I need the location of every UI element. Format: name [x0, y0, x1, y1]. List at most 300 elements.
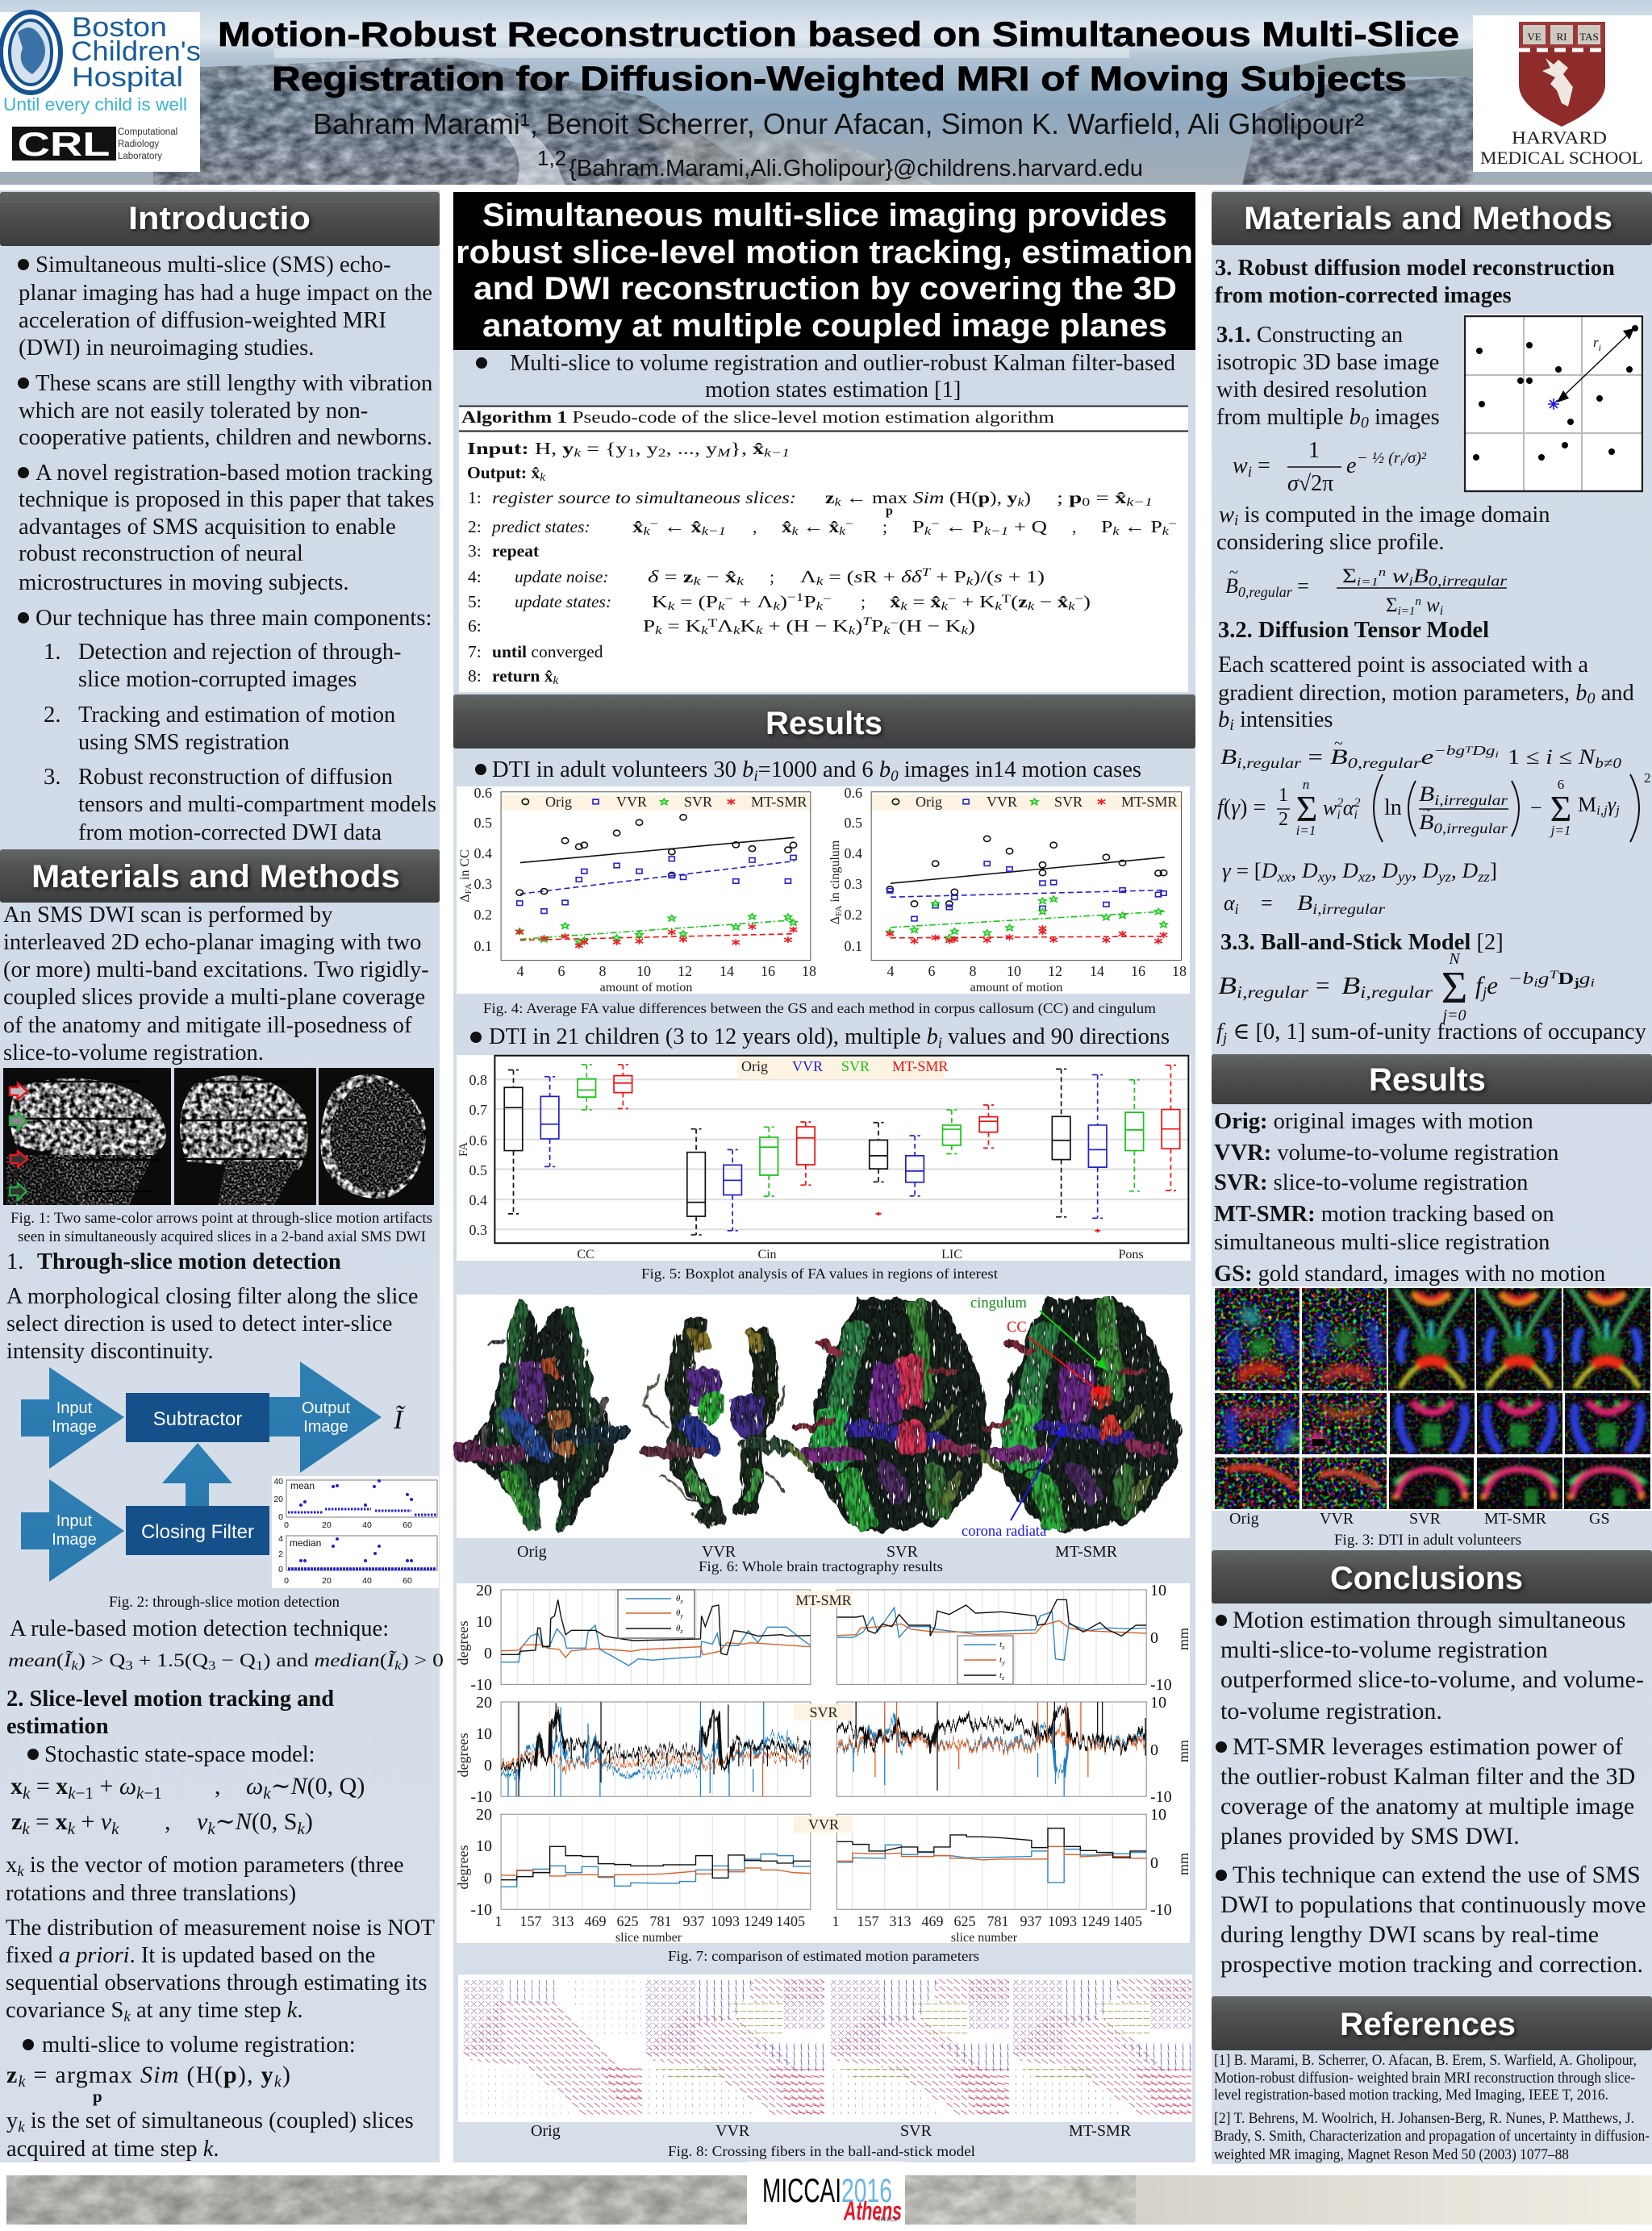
text block: introduction bullets: which are not easily tolerated by non-	[19, 398, 368, 423]
equation: regular b0: ~	[1229, 564, 1238, 582]
equation: motion detection rule: 3	[125, 1659, 133, 1673]
callout: CC arrow: CC	[1007, 1320, 1027, 1336]
algorithm lines: s + 1)	[994, 567, 1036, 586]
algorithm lines: x̂	[690, 517, 702, 536]
figure 4 caption: Fig. 4: Average FA value differences between the GS and each method in corpus callosum (CC) and cingulum	[483, 1000, 1156, 1017]
scatter plot: corpus callosum: 0.3	[474, 876, 492, 892]
algorithm lines: = {y	[581, 439, 628, 458]
text block: introduction bullets: from motion-corrected DWI data	[78, 820, 382, 845]
CRL logo: Laboratory	[118, 152, 162, 161]
method labels: Orig	[531, 2122, 561, 2140]
equation: tensor signal: ~	[1334, 735, 1343, 753]
equation: ball-and-stick	[1218, 950, 1595, 1024]
slice number ticks: 1093	[1048, 1913, 1077, 1929]
algorithm lines: z	[825, 488, 835, 507]
equation: gamma vector: zz	[1477, 869, 1490, 885]
equation: state model: k	[136, 1783, 144, 1803]
text block: weight note	[1216, 502, 1550, 555]
algorithm lines: k−1	[764, 447, 790, 460]
algorithm lines: −	[890, 617, 899, 630]
algorithm lines: )	[855, 616, 862, 636]
boxes: LIC	[870, 1123, 887, 1182]
inset chart: mean and median intensity: 60	[403, 1576, 412, 1586]
slice number ticks: 1093	[711, 1913, 740, 1929]
algorithm lines: −	[650, 518, 658, 531]
axis labels: 20	[476, 1694, 492, 1712]
equation: measurement model: z	[11, 1808, 22, 1835]
algorithm lines: ← P	[1119, 517, 1162, 536]
inset chart: mean and median intensity: 4	[278, 1534, 283, 1544]
algorithm lines: Λ	[717, 616, 733, 636]
algorithm lines: k	[756, 624, 763, 637]
algorithm lines: k	[733, 624, 740, 637]
bullet: DTI in adult volunteers: b	[879, 757, 891, 782]
bullet: multi-slice to volume: Multi-slice to volume registration and outlier-robust Kalman filter-based	[510, 351, 1175, 376]
slice number ticks: 625	[616, 1913, 639, 1929]
equation: ball-and-stick: j=0	[1440, 1007, 1466, 1024]
text block: coupled slices: k	[18, 2119, 25, 2136]
algorithm lines: ← max	[841, 488, 913, 507]
scatter plot: cingulum: 10	[1007, 963, 1021, 979]
slice number ticks: 1	[832, 1913, 839, 1929]
algorithm lines: update states:	[515, 592, 611, 611]
figure 3: DTI colour maps	[1212, 1286, 1652, 1528]
figure 6 caption: Fig. 6: Whole brain tractography results	[699, 1558, 943, 1574]
algorithm lines: sR + δδ	[854, 567, 917, 586]
figure 7 caption: Fig. 7: comparison of estimated motion parameters	[668, 1948, 979, 1964]
scatter plot: cingulum: 0.1	[844, 938, 862, 954]
CRL logo: Computational	[118, 127, 177, 137]
slice number ticks: 469	[921, 1913, 944, 1929]
figure 5: boxplot of FA values: 0.5	[469, 1162, 487, 1178]
figure 4: FA difference scatter plots	[457, 785, 1190, 995]
text block: motion parameters: is the vector of motion parameters (three	[24, 1853, 404, 1878]
heading: Introduction: Introductio	[128, 201, 311, 236]
figure 5: boxplot of FA values: 0.3	[469, 1222, 487, 1238]
text block: introduction bullets: These scans are still lengthy with vibration	[35, 370, 432, 396]
equation: registration objective	[6, 2062, 290, 2106]
figure 3 caption: Fig. 3: DTI in adult volunteers	[1334, 1532, 1521, 1549]
figure 5: boxplot of FA values: MT-SMR	[892, 1058, 948, 1074]
method labels: VVR	[702, 1543, 736, 1561]
equation: tensor cost function: ln	[1384, 795, 1402, 820]
inset chart: mean and median intensity: 40	[362, 1576, 372, 1586]
text block: introduction bullets: Simultaneous multi-slice (SMS) echo-	[35, 252, 391, 277]
equation: tensor cost function: i=1	[1296, 823, 1316, 838]
scatter plot: cingulum: 4	[887, 963, 894, 979]
slice number ticks: 937	[1020, 1913, 1042, 1929]
text block: introduction bullets: Our technique has three main components:	[35, 605, 432, 631]
text block: scattered point: intensities	[1234, 707, 1333, 732]
algorithm lines: k	[816, 575, 824, 588]
method labels: SVR	[900, 2122, 932, 2140]
bullet: DTI in adult volunteers: i	[753, 768, 758, 785]
inset chart: mean and median intensity: 20	[322, 1576, 332, 1586]
figure 5: boxplot of FA values: 0.4	[469, 1192, 487, 1208]
CRL logo	[12, 125, 177, 163]
text block: conclusions	[1216, 1607, 1646, 1978]
algorithm lines: p	[886, 504, 893, 518]
heading: Introduction	[0, 192, 440, 246]
equation: motion detection rule: median (Ĩ	[314, 1650, 394, 1671]
algorithm lines: −	[724, 593, 733, 606]
key message: Simultaneous multi-slice imaging provides	[482, 198, 1167, 233]
algorithm lines: x̂	[890, 592, 901, 611]
legend: translations: y	[1001, 1659, 1005, 1666]
callout: corona radiata arrow	[962, 1424, 1066, 1540]
algorithm lines: −	[845, 518, 853, 531]
algorithm lines: x̂	[1058, 592, 1069, 611]
subheading: through-slice motion detection: 1.	[6, 1249, 23, 1274]
axis labels: 0	[484, 1757, 492, 1774]
algorithm lines: 7:	[468, 642, 482, 661]
equation: Gaussian weight: w	[1233, 453, 1248, 478]
scatter plot: cingulum: 0.6	[844, 785, 862, 801]
text block: method definitions: simultaneous multi-slice registration	[1214, 1230, 1550, 1255]
algorithm lines: k	[941, 600, 948, 613]
text block: coupled slices	[6, 2108, 414, 2162]
algorithm lines: 1	[628, 447, 636, 460]
algorithm lines: k	[1068, 600, 1075, 613]
scatter plot: cingulum: Orig	[916, 794, 942, 810]
algorithm lines: −	[823, 593, 832, 606]
equation: tensor signal: B	[1220, 745, 1233, 769]
legend: translations: z	[1001, 1674, 1005, 1682]
text block: conclusions: MT-SMR leverages estimation power of	[1233, 1733, 1623, 1760]
heading: Conclusions: Conclusions	[1330, 1561, 1523, 1596]
equation: ball-and-stick: e	[1487, 971, 1498, 999]
algorithm lines: + P	[930, 567, 966, 586]
Boston Children's Hospital and CRL logo	[0, 12, 201, 172]
equation: gamma vector: , D	[1412, 859, 1438, 882]
equation: Gaussian weight: =	[1252, 453, 1270, 478]
algorithm lines: ;	[882, 517, 887, 536]
equation: state model: ω	[119, 1773, 136, 1799]
panel: right column	[1212, 190, 1652, 2164]
box: subtractor: Subtractor	[153, 1408, 242, 1430]
text block: base image construction: 0	[1361, 414, 1369, 432]
axis labels: -10	[470, 1788, 492, 1806]
algorithm lines: = (P	[674, 592, 718, 611]
algorithm lines: ,	[753, 517, 757, 536]
equation: tensor signal: i,regular	[1237, 755, 1302, 771]
bullet: multi-slice to volume	[476, 351, 1175, 402]
equation: registration objective: p	[93, 2087, 102, 2106]
algorithm lines: ;	[861, 592, 866, 611]
equation: tensor cost function: i	[1354, 808, 1358, 822]
algorithm lines: x̂	[753, 439, 764, 458]
algorithm lines: k	[849, 624, 856, 637]
figure 1 caption: seen in simultaneously acquired slices in a 2-band axial SMS DWI	[18, 1228, 426, 1245]
equation: regular b0: 0,irregular	[1429, 573, 1508, 589]
slice number ticks: 1405	[1113, 1913, 1142, 1929]
DTI row 1	[1215, 1288, 1650, 1391]
text block: fractions of occupancy: ∈ [0, 1] sum-of-unity fractions of occupancy	[1227, 1020, 1647, 1045]
arrow: output image: Image	[303, 1418, 348, 1436]
legend: rotations: x	[679, 1598, 683, 1605]
algorithm lines: k	[792, 525, 799, 538]
text block: weight note: is computed in the image domain	[1238, 502, 1550, 528]
scatter plot: corpus callosum: 0.6	[474, 785, 492, 801]
box: subtractor	[126, 1393, 269, 1442]
scatter plot: corpus callosum: 12	[678, 963, 692, 979]
slice number ticks: 625	[953, 1913, 976, 1929]
equation: tensor signal: b≠0	[1595, 755, 1621, 771]
equation: ball-and-stick: i,regular	[1360, 982, 1433, 1002]
Harvard shield: RI	[1557, 31, 1566, 43]
equation: measurement model: )	[305, 1808, 313, 1835]
text block: SMS DWI scan description: slice-to-volume registration.	[3, 1040, 264, 1065]
text block: references: Motion-robust diffusion- weighted brain MRI reconstruction through slice-	[1214, 2070, 1635, 2087]
panel: left column	[0, 190, 444, 2162]
text block: motion parameters: x	[6, 1853, 17, 1878]
method labels: MT-SMR	[1055, 1543, 1118, 1561]
equation: measurement model: k	[207, 1819, 215, 1838]
algorithm lines: P	[1101, 517, 1111, 536]
equation: regular b0: w	[1386, 565, 1409, 587]
equation: gamma vector: , D	[1332, 859, 1358, 882]
equation: state model: k	[68, 1783, 76, 1803]
equation: alpha: =	[1261, 891, 1273, 915]
hospital wordmark: Boston	[72, 12, 167, 43]
algorithm lines: −	[948, 593, 957, 606]
diagram: scattered points on regular grid: r	[1593, 335, 1599, 350]
algorithm lines: k	[1017, 496, 1024, 509]
equation: ball-and-stick: i,regular	[1237, 982, 1309, 1002]
text block: method definitions: MT-SMR: motion tracking based on	[1214, 1202, 1554, 1227]
algorithm lines: k	[553, 674, 558, 687]
text block: conclusions: Motion estimation through simultaneous	[1233, 1607, 1625, 1633]
axis labels: 10	[476, 1725, 492, 1743]
axis labels: 0	[484, 1645, 492, 1662]
axis labels: 0	[484, 1870, 492, 1887]
equation: regular b0: n	[1379, 566, 1386, 579]
algorithm lines: k	[693, 575, 701, 588]
equation: ball-and-stick: Σ	[1441, 963, 1467, 1013]
algorithm lines: −	[931, 518, 940, 531]
equation: ball-and-stick: j	[1480, 984, 1487, 1002]
figure 1 caption	[10, 1210, 432, 1245]
equation: regular b0: B	[1413, 565, 1429, 587]
scatter plot: cingulum: 18	[1172, 963, 1187, 979]
panel: middle column	[453, 192, 1195, 2162]
crest roundel	[1, 12, 60, 93]
text block: conclusions: This technique can extend the use of SMS	[1233, 1862, 1641, 1888]
bullet: multi-slice to volume registration: multi-slice to volume registration:	[42, 2033, 356, 2058]
algorithm lines: K	[652, 592, 665, 611]
school name	[1480, 127, 1643, 168]
equation: measurement model: N(0, S	[236, 1808, 297, 1835]
bullet: DTI in children: DTI in 21 children (3 to 12 years old), multiple b	[489, 1024, 938, 1049]
line chart: VVR translations	[836, 1829, 1146, 1883]
title: Motion-Robust Reconstruction based on Simultaneous Multi-Slice	[218, 15, 1459, 54]
equation: tensor cost function: i,irregular	[1434, 792, 1508, 808]
row labels: SVR	[809, 1704, 838, 1720]
subheading: through-slice motion detection: Through-slice motion detection	[37, 1249, 341, 1274]
heading: Results	[1212, 1054, 1652, 1104]
axis labels	[455, 1582, 1191, 1919]
slice number ticks: 937	[682, 1913, 705, 1929]
legend: rotations: θ	[676, 1624, 680, 1633]
text block: introduction bullets: A novel registration-based motion tracking	[35, 460, 432, 486]
subheading: slice-level motion tracking: estimation	[6, 1714, 109, 1739]
equation: ball-and-stick: N	[1448, 950, 1461, 968]
inset chart: mean and median intensity: mean	[290, 1480, 315, 1491]
Harvard shield: TAS	[1579, 31, 1599, 43]
text block: coupled slices: acquired at time step k.	[6, 2137, 219, 2162]
text block: method definitions: Orig: original images with motion	[1214, 1109, 1533, 1134]
algorithm lines: k−1	[702, 525, 726, 538]
heading: References: References	[1340, 2007, 1516, 2042]
text block: introduction bullets	[18, 252, 436, 845]
fiber field: VVR	[645, 1979, 824, 2116]
arrow: input image to closing filter	[21, 1479, 124, 1582]
equation: gamma vector: xy	[1317, 869, 1332, 885]
algorithm lines: , y	[636, 439, 658, 458]
key message: anatomy at multiple coupled image planes	[482, 308, 1167, 344]
boxes: Cin	[687, 1129, 705, 1235]
algorithm lines: −	[1075, 593, 1083, 606]
equation: tensor cost function: 2	[1279, 809, 1288, 830]
equation: state model	[10, 1773, 365, 1803]
algorithm lines: k	[961, 624, 968, 637]
affiliation and email: 1,2	[537, 146, 566, 170]
equation: tensor cost function: 0,irregular	[1433, 820, 1508, 836]
equation: tensor cost function: 2	[1337, 796, 1343, 810]
text block: references: weighted MR imaging, Magnet Reson Med 50 (2003) 1077–88	[1214, 2146, 1569, 2163]
axis labels: -10	[1150, 1788, 1172, 1806]
algorithm lines: ,	[1072, 517, 1076, 536]
text block: morphological closing filter: select direction is used to detect inter-slice	[6, 1311, 392, 1337]
equation: measurement model: ,	[165, 1808, 171, 1835]
equation: state model: ∼	[271, 1773, 291, 1799]
equation: ball-and-stick: =	[1316, 971, 1329, 999]
equation: tensor cost function: −	[1530, 796, 1542, 819]
equation: state model: x	[10, 1773, 23, 1799]
text block: scattered point	[1218, 653, 1634, 734]
equation: Gaussian weight	[1233, 438, 1427, 496]
algorithm lines: k	[736, 575, 744, 588]
equation: motion detection rule: + 1.5(Q	[133, 1650, 208, 1671]
equation: ball-and-stick: f	[1475, 971, 1483, 999]
scatter plot: corpus callosum: 18	[802, 963, 816, 979]
scatter plot: corpus callosum: 14	[720, 963, 734, 979]
scatter plot: corpus callosum: 16	[761, 963, 775, 979]
heading: Materials and Methods: Materials and Methods	[31, 859, 400, 894]
equation: gamma vector: , D	[1371, 859, 1398, 882]
row labels: MT-SMR	[795, 1592, 852, 1608]
algorithm lines: (H − K	[899, 616, 962, 636]
algorithm lines: )	[968, 616, 975, 636]
scatter plot: cingulum	[828, 785, 1187, 995]
equation: measurement model: ν	[197, 1808, 208, 1835]
algorithm lines: P	[643, 616, 653, 636]
equation: tensor signal: Dg	[1471, 743, 1495, 758]
text block: method definitions: SVR: slice-to-volume registration	[1214, 1170, 1528, 1195]
scatter plot: cingulum: SVR	[1054, 794, 1083, 810]
equation: registration objective: k	[274, 2073, 282, 2091]
line chart: VVR rotations	[501, 1846, 811, 1887]
axis labels: degrees	[455, 1621, 471, 1665]
line chart: MT-SMR rotations	[501, 1599, 811, 1666]
text block: SMS DWI scan description: (or more) multi-band excitations. Two rigidly-	[3, 957, 429, 982]
axis labels: 10	[1150, 1806, 1166, 1824]
equation: tensor cost function: 1	[1279, 785, 1288, 806]
method labels: Orig	[517, 1543, 547, 1561]
text block: coupled slices: y	[6, 2108, 18, 2133]
equation: tensor cost function: n	[1303, 777, 1309, 792]
method labels	[1229, 1510, 1610, 1528]
MICCAI 2016 Athens logo: Athens	[843, 2196, 902, 2225]
legend: translations	[957, 1636, 1013, 1684]
scatter plot: corpus callosum: 0.1	[474, 938, 492, 954]
text block: introduction bullets: Detection and rejection of through-	[78, 640, 401, 665]
text block: introduction bullets: technique is proposed in this paper that takes	[19, 486, 434, 512]
text block: scattered point: i	[1229, 716, 1234, 734]
tractography: MT-SMR	[980, 1299, 1179, 1533]
algorithm lines: x̂	[1115, 488, 1127, 507]
text block: introduction bullets: using SMS registration	[78, 730, 290, 755]
algorithm lines: −	[1034, 592, 1058, 611]
heading: Results	[453, 694, 1195, 749]
heading: Materials and Methods: Materials and Methods	[1244, 201, 1612, 236]
equation: motion detection rule: − Q	[215, 1650, 256, 1671]
algorithm lines: 5:	[468, 592, 482, 611]
equation: motion detection rule: mean (Ĩ	[8, 1650, 70, 1671]
hospital wordmark: Children's	[71, 36, 201, 67]
equation: tensor cost function: α	[1343, 796, 1355, 819]
equation: alpha: α	[1224, 891, 1235, 915]
equation: tensor signal: =	[1301, 745, 1323, 769]
equation: state model: ω	[246, 1773, 263, 1799]
boxes: CC	[504, 1065, 1180, 1235]
figure 5 caption: Fig. 5: Boxplot analysis of FA values in regions of interest	[641, 1266, 998, 1282]
figure 8: crossing fibers	[458, 1975, 1192, 2140]
method labels: MT-SMR	[1069, 2122, 1132, 2140]
fiber field: MT-SMR	[1012, 1979, 1191, 2116]
equation: tensor cost function: ~	[1423, 802, 1431, 818]
axis labels: 0	[1150, 1629, 1158, 1647]
figure 5: boxplot of FA values: LIC	[941, 1248, 962, 1261]
legend: rotations	[618, 1590, 695, 1638]
text block: introduction bullets: planar imaging has had a huge impact on the	[19, 280, 432, 306]
equation: measurement model: k	[68, 1819, 76, 1838]
title	[218, 15, 1459, 98]
equation: registration objective: )	[282, 2062, 290, 2088]
header banner	[0, 0, 1652, 185]
axis labels: degrees	[455, 1733, 471, 1777]
algorithm lines: P	[871, 616, 883, 636]
figure 5: boxplot of FA values: 0.8	[469, 1072, 487, 1088]
figure 2: flowchart of through-slice motion detection	[21, 1362, 439, 1588]
method labels: GS	[1589, 1510, 1610, 1528]
algorithm lines: register source to simultaneous slices:	[492, 488, 796, 507]
algorithm lines: K	[740, 616, 757, 636]
equation: alpha	[1224, 891, 1386, 917]
algorithm lines: k	[655, 624, 662, 637]
heading: Results: Results	[766, 706, 882, 741]
algorithm lines: 4:	[468, 567, 482, 586]
figure 5: boxplot of FA values	[457, 1055, 1191, 1261]
equation: gamma vector: yy	[1396, 869, 1412, 885]
text block: conclusions: to-volume registration.	[1220, 1698, 1442, 1724]
equation: ball-and-stick: g	[1579, 969, 1591, 988]
algorithm lines: k−1	[1126, 496, 1153, 509]
inset chart: mean and median intensity: 40	[273, 1477, 283, 1487]
algorithm lines: k	[718, 600, 725, 613]
figure 5: boxplot of FA values: FA	[457, 1142, 470, 1157]
equation: motion detection rule: 1	[256, 1659, 263, 1673]
